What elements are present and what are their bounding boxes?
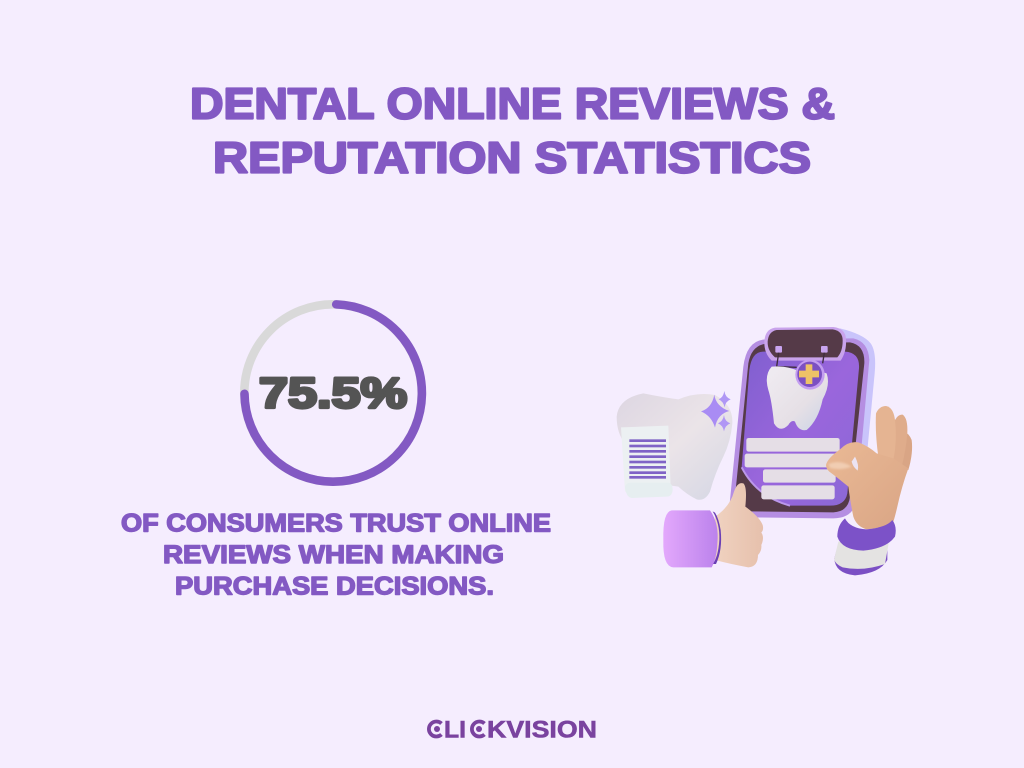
form lines	[745, 438, 840, 499]
illustration: dental clipboard with hands	[617, 327, 912, 575]
icon: large tooth with sparkles	[617, 391, 732, 500]
logo: ClickVision: KVISION	[487, 716, 597, 744]
statistic description: PURCHASE DECISIONS.	[175, 572, 494, 600]
title: REPUTATION STATISTICS	[213, 134, 811, 182]
index finger	[876, 406, 896, 460]
document	[621, 426, 673, 498]
logo: ClickVision	[429, 716, 597, 744]
statistic description: OF CONSUMERS TRUST ONLINE	[121, 510, 551, 538]
palm	[826, 442, 908, 529]
icon: OK hand	[826, 406, 912, 575]
statistic value: 75.5%	[259, 370, 407, 418]
ring finger	[895, 433, 912, 470]
icon: logo letter C	[429, 722, 484, 737]
title: DENTAL ONLINE REVIEWS &	[190, 80, 835, 128]
clip	[764, 327, 846, 361]
statistic description: REVIEWS WHEN MAKING	[163, 541, 504, 569]
middle finger	[890, 415, 907, 467]
icon: tooth with plus badge	[767, 360, 828, 430]
clipboard	[730, 327, 875, 518]
statistic description	[121, 510, 551, 600]
title	[190, 80, 835, 182]
chart: 75.5% progress ring	[244, 304, 423, 482]
logo: ClickVision: LI	[444, 716, 466, 744]
icon: thumbs up hand	[663, 483, 763, 567]
cuff	[834, 547, 887, 575]
